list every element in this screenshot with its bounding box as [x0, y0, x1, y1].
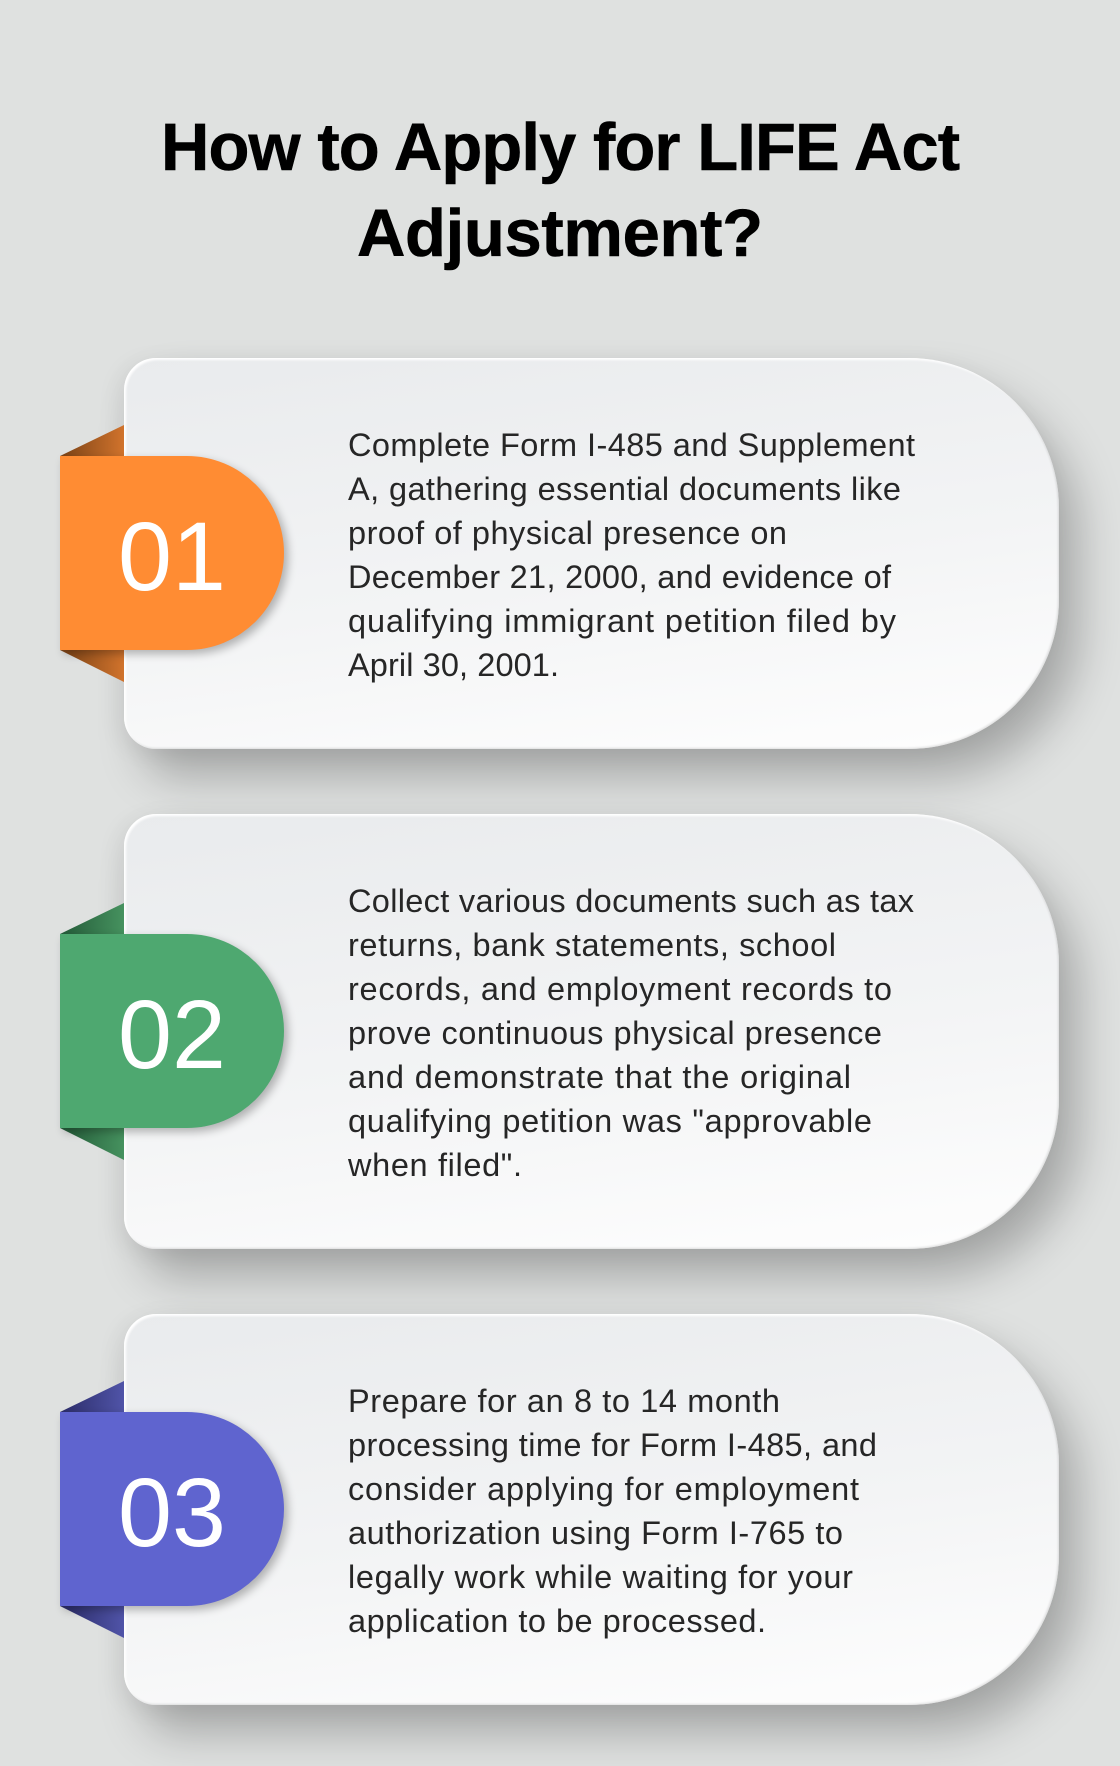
number badge 03 — [60, 1412, 284, 1606]
number badge 02 — [60, 934, 284, 1128]
number badge 02: 02 — [118, 980, 226, 1089]
card background — [124, 814, 1059, 1249]
step 02 text: records, and employment records to — [348, 971, 892, 1007]
ribbon fold top — [60, 425, 124, 456]
title: How to Apply for LIFE Act — [161, 110, 960, 185]
step 03 text — [348, 1383, 877, 1639]
panel: step 03 — [60, 1311, 1101, 1755]
step 02 text: prove continuous physical presence — [348, 1015, 882, 1051]
ribbon fold bottom — [60, 1128, 124, 1160]
ribbon fold top — [60, 903, 124, 934]
step 03 text: legally work while waiting for your — [348, 1559, 853, 1595]
panel: step 02 — [60, 811, 1101, 1299]
step 02 text: Collect various documents such as tax — [348, 883, 914, 919]
step 02 text: and demonstrate that the original — [348, 1059, 851, 1095]
number badge 01 — [60, 456, 284, 650]
step 03 text: application to be processed. — [348, 1603, 766, 1639]
step 03 text: authorization using Form I-765 to — [348, 1515, 843, 1551]
number badge 01: 01 — [118, 502, 226, 611]
step 01 text: A, gathering essential documents like — [348, 471, 901, 507]
step 01 text: proof of physical presence on — [348, 515, 787, 551]
ribbon fold bottom — [60, 1606, 124, 1638]
number badge 03: 03 — [118, 1458, 226, 1567]
step 03 text: processing time for Form I-485, and — [348, 1427, 877, 1463]
title — [161, 110, 960, 271]
step 02 text: returns, bank statements, school — [348, 927, 836, 963]
step 01 text: December 21, 2000, and evidence of — [348, 559, 892, 595]
ribbon fold bottom — [60, 650, 124, 682]
step 02 text: when filed". — [347, 1147, 522, 1183]
step 01 text: Complete Form I-485 and Supplement — [348, 427, 915, 463]
step 02 text: qualifying petition was "approvable — [348, 1103, 872, 1139]
step 03 text: Prepare for an 8 to 14 month — [348, 1383, 780, 1419]
step 02 text — [347, 883, 914, 1183]
step 03 text: consider applying for employment — [348, 1471, 859, 1507]
card background — [124, 1314, 1059, 1705]
step 01 text — [348, 427, 915, 683]
panel: step 01 — [60, 355, 1101, 799]
card background — [124, 358, 1059, 749]
step 01 text: April 30, 2001. — [348, 647, 559, 683]
step 01 text: qualifying immigrant petition filed by — [348, 603, 897, 639]
ribbon fold top — [60, 1381, 124, 1412]
title: Adjustment? — [357, 196, 763, 271]
